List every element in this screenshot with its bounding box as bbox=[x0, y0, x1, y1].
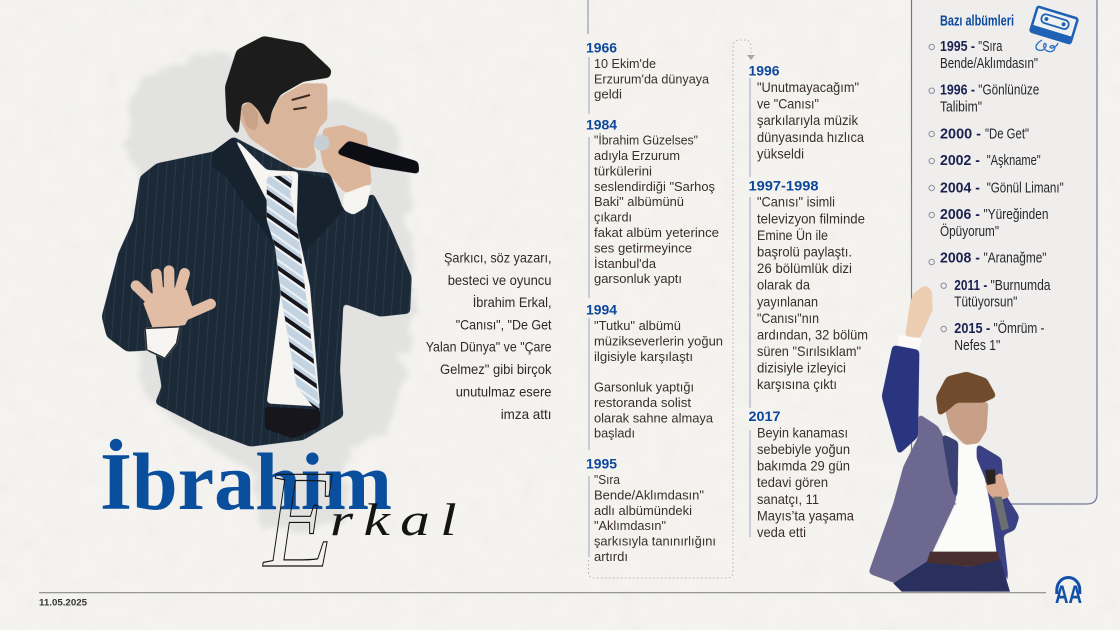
1997-1998 entry bbox=[748, 178, 868, 408]
1995 entry: şarkısıyla tanınırlığını bbox=[594, 533, 716, 548]
album 2000: 2000 - bbox=[940, 125, 981, 142]
2017 entry: 2017 bbox=[748, 409, 780, 424]
jacket bbox=[102, 137, 412, 447]
right jacket side bbox=[977, 443, 1019, 592]
timeline column two bbox=[748, 64, 868, 540]
1984 entry bbox=[586, 118, 719, 298]
shirt bbox=[933, 427, 998, 553]
1984 entry: İstanbul'da bbox=[594, 256, 657, 271]
1995 entry bbox=[586, 456, 716, 564]
tie bbox=[267, 175, 321, 417]
album 2011: 2011 - bbox=[954, 277, 987, 294]
1996 entry: ve "Canısı" bbox=[757, 96, 819, 112]
intro paragraph: "Canısı", "De Get bbox=[456, 316, 552, 332]
album 1995: Bende/Aklımdasın" bbox=[940, 55, 1038, 72]
intro paragraph: besteci ve oyuncu bbox=[448, 272, 552, 288]
album 1996: Talibim" bbox=[940, 99, 982, 116]
1997-1998 entry: dizisiyle izleyici bbox=[757, 360, 846, 376]
album 1996: "Gönlünüze bbox=[978, 82, 1039, 99]
raised hand bbox=[905, 285, 933, 338]
1997-1998 entry: Emine Ün ile bbox=[757, 226, 828, 243]
1997-1998 entry: "Canısı"nın bbox=[757, 310, 819, 326]
2017 entry bbox=[748, 409, 854, 540]
logo: AA bbox=[1055, 578, 1082, 609]
album 2015: "Ömrüm - bbox=[994, 319, 1045, 337]
1997-1998 entry: 1997-1998 bbox=[748, 178, 819, 193]
2017 entry: tedavi gören bbox=[757, 474, 828, 490]
1997-1998 entry: yayınlanan bbox=[757, 293, 818, 309]
right sleeve bbox=[882, 345, 919, 455]
album 2000 bbox=[940, 125, 1029, 142]
face bbox=[945, 402, 988, 445]
arrow head bbox=[747, 55, 755, 60]
1966 entry bbox=[586, 40, 710, 114]
2017 entry: sebebiyle yoğun bbox=[757, 441, 850, 457]
1984 entry: fakat albüm yeterince bbox=[594, 225, 719, 240]
intro paragraph: Yalan Dünya" ve "Çare bbox=[426, 339, 552, 355]
intro paragraph: Gelmez" gibi birçok bbox=[440, 361, 552, 377]
intro paragraph bbox=[426, 250, 552, 422]
album 2015 bbox=[954, 319, 1045, 354]
1994 entry: 1994 bbox=[586, 302, 617, 318]
date: 11.05.2025 bbox=[39, 598, 88, 609]
1994 entry: restoranda solist bbox=[594, 395, 691, 410]
intro paragraph: unutulmaz esere bbox=[456, 384, 552, 400]
hair bbox=[225, 36, 332, 137]
1966 entry: 1966 bbox=[586, 40, 617, 56]
belt bbox=[265, 407, 320, 438]
1996 entry: şarkılarıyla müzik bbox=[757, 112, 859, 128]
1994 entry: "Tutku" albümü bbox=[594, 318, 681, 333]
1984 entry: "İbrahim Güzelses" bbox=[594, 133, 698, 148]
1995 entry: "Aklımdasın" bbox=[594, 518, 666, 533]
belt bbox=[927, 552, 999, 567]
1966 entry: Erzurum'da dünyaya bbox=[594, 71, 710, 86]
trousers bbox=[893, 558, 1010, 592]
1984 entry: seslendirdiği "Sarhoş bbox=[594, 179, 715, 194]
1994 entry: olarak sahne almaya bbox=[594, 410, 714, 425]
intro paragraph: imza attı bbox=[501, 406, 552, 422]
album 2011: "Burnumda bbox=[990, 277, 1051, 294]
album list bullets bbox=[929, 44, 946, 332]
album 2006: "Yüreğinden bbox=[984, 206, 1048, 223]
1984 entry: adıyla Erzurum bbox=[594, 148, 680, 163]
1984 entry: çıkardı bbox=[594, 210, 632, 225]
microphone bbox=[985, 469, 996, 485]
1984 entry: garsonluk yaptı bbox=[594, 271, 682, 286]
1996 entry bbox=[748, 64, 864, 177]
1995 entry: "Sıra bbox=[594, 472, 621, 487]
1997-1998 entry: 26 bölümlük dizi bbox=[757, 260, 852, 276]
album 2004 bbox=[940, 179, 1064, 196]
timeline top rule bbox=[587, 0, 589, 34]
1997-1998 entry: ardından, 32 bölüm bbox=[757, 326, 868, 342]
1996 entry: 1996 bbox=[748, 64, 780, 78]
album 2002: 2002 - bbox=[940, 152, 980, 169]
2017 entry: sanatçı, 11 bbox=[757, 491, 819, 507]
album 2000: "De Get" bbox=[985, 125, 1029, 142]
1997-1998 entry: olarak da bbox=[757, 277, 810, 293]
eye and brow bbox=[292, 95, 310, 109]
album 2004: "Gönül Limanı" bbox=[987, 179, 1064, 196]
1996 entry: yükseldi bbox=[757, 145, 804, 161]
album 2015: Nefes 1" bbox=[954, 337, 1000, 354]
album 2002 bbox=[940, 152, 1041, 169]
jacket bbox=[868, 413, 958, 585]
microphone handle bbox=[993, 497, 1009, 531]
album 2011: Tütüyorsun" bbox=[954, 294, 1017, 311]
1994 entry: başladı bbox=[594, 426, 635, 441]
ear bbox=[241, 102, 258, 132]
hair bbox=[936, 372, 997, 417]
hand holding microphone bbox=[985, 472, 1010, 502]
title: name: İbrahim bbox=[100, 436, 392, 527]
album 2006 bbox=[940, 206, 1048, 240]
album 1995: "Sıra bbox=[978, 38, 1003, 55]
1995 entry: Bende/Aklımdasın" bbox=[594, 487, 704, 502]
portrait: singer with microphone bbox=[102, 36, 419, 447]
lapel bbox=[212, 137, 343, 253]
photo: singer with raised arm bbox=[868, 285, 1019, 592]
album 2008: "Aranağme" bbox=[984, 250, 1046, 267]
singing hand bbox=[320, 125, 372, 194]
intro paragraph: Şarkıcı, söz yazarı, bbox=[444, 250, 552, 266]
timeline column one bbox=[586, 40, 723, 564]
neck and face bbox=[240, 83, 327, 168]
album 2008: 2008 - bbox=[940, 250, 980, 267]
2017 entry: veda etti bbox=[757, 524, 806, 540]
1994 entry: müzikseverlerin yoğun bbox=[594, 333, 723, 348]
2017 entry: bakımda 29 gün bbox=[757, 458, 850, 474]
1984 entry: Baki" albümünü bbox=[594, 194, 684, 209]
album 1995 bbox=[940, 38, 1038, 72]
album 2008 bbox=[940, 250, 1046, 267]
album 2011 bbox=[954, 277, 1051, 311]
album 2004: 2004 - bbox=[940, 179, 980, 196]
1984 entry: 1984 bbox=[586, 118, 617, 132]
dotted path between columns bbox=[588, 40, 751, 578]
left cuff bbox=[145, 327, 180, 358]
album 2006: Öpüyorum" bbox=[940, 222, 999, 240]
1994 entry bbox=[586, 302, 723, 450]
footer line bbox=[39, 592, 1046, 594]
panel heading: Bazı albümleri bbox=[940, 14, 1014, 30]
panel frame bbox=[912, 0, 1097, 504]
1995 entry: adlı albümündeki bbox=[594, 503, 692, 518]
1997-1998 entry: "Canısı" isimli bbox=[757, 194, 835, 210]
1994 entry: ilgisiyle karşılaştı bbox=[594, 349, 693, 364]
lapel dark bbox=[942, 433, 958, 503]
album 1996 bbox=[940, 82, 1039, 116]
icon: cassette bbox=[1030, 6, 1078, 44]
1984 entry: ses getirmeyince bbox=[594, 240, 692, 255]
microphone bbox=[336, 141, 419, 174]
album 2015: 2015 - bbox=[954, 320, 990, 337]
album 1995: 1995 - bbox=[940, 38, 975, 55]
intro paragraph: İbrahim Erkal, bbox=[473, 293, 552, 310]
1995 entry: artırdı bbox=[594, 549, 628, 564]
1997-1998 entry: başrolü paylaştı. bbox=[757, 244, 852, 260]
album 2002: "Aşkname" bbox=[987, 152, 1041, 169]
microphone head bbox=[314, 135, 330, 151]
2017 entry: Beyin kanaması bbox=[757, 424, 848, 440]
cuff bbox=[343, 183, 372, 215]
album 2006: 2006 - bbox=[940, 206, 980, 223]
2017 entry: Mayıs’ta yaşama bbox=[757, 507, 854, 523]
logo: AA: AA bbox=[1055, 581, 1082, 609]
icon: loose tape bbox=[1036, 40, 1058, 52]
1994 entry: Garsonluk yaptığı bbox=[594, 380, 694, 394]
shirt bbox=[233, 137, 320, 407]
1997-1998 entry: televizyon filminde bbox=[757, 210, 865, 226]
1984 entry: türkülerini bbox=[594, 163, 652, 178]
signature: surname: E bbox=[262, 442, 334, 597]
1996 entry: "Unutmayacağım" bbox=[757, 79, 859, 95]
1996 entry: dünyasında hızlıca bbox=[757, 129, 864, 145]
1995 entry: 1995 bbox=[586, 456, 617, 472]
open hand bbox=[136, 271, 211, 330]
album 1996: 1996 - bbox=[940, 82, 975, 99]
panel: albums bbox=[912, 0, 1097, 504]
signature: surname: rkal bbox=[330, 494, 467, 545]
1997-1998 entry: süren "Sırılsıklam" bbox=[757, 343, 861, 359]
watercolor backdrop bbox=[120, 55, 420, 535]
raised cuff bbox=[898, 335, 922, 350]
1997-1998 entry: karşısına çıktı bbox=[757, 376, 837, 392]
1966 entry: 10 Ekim'de bbox=[594, 56, 656, 71]
1966 entry: geldi bbox=[594, 87, 622, 102]
